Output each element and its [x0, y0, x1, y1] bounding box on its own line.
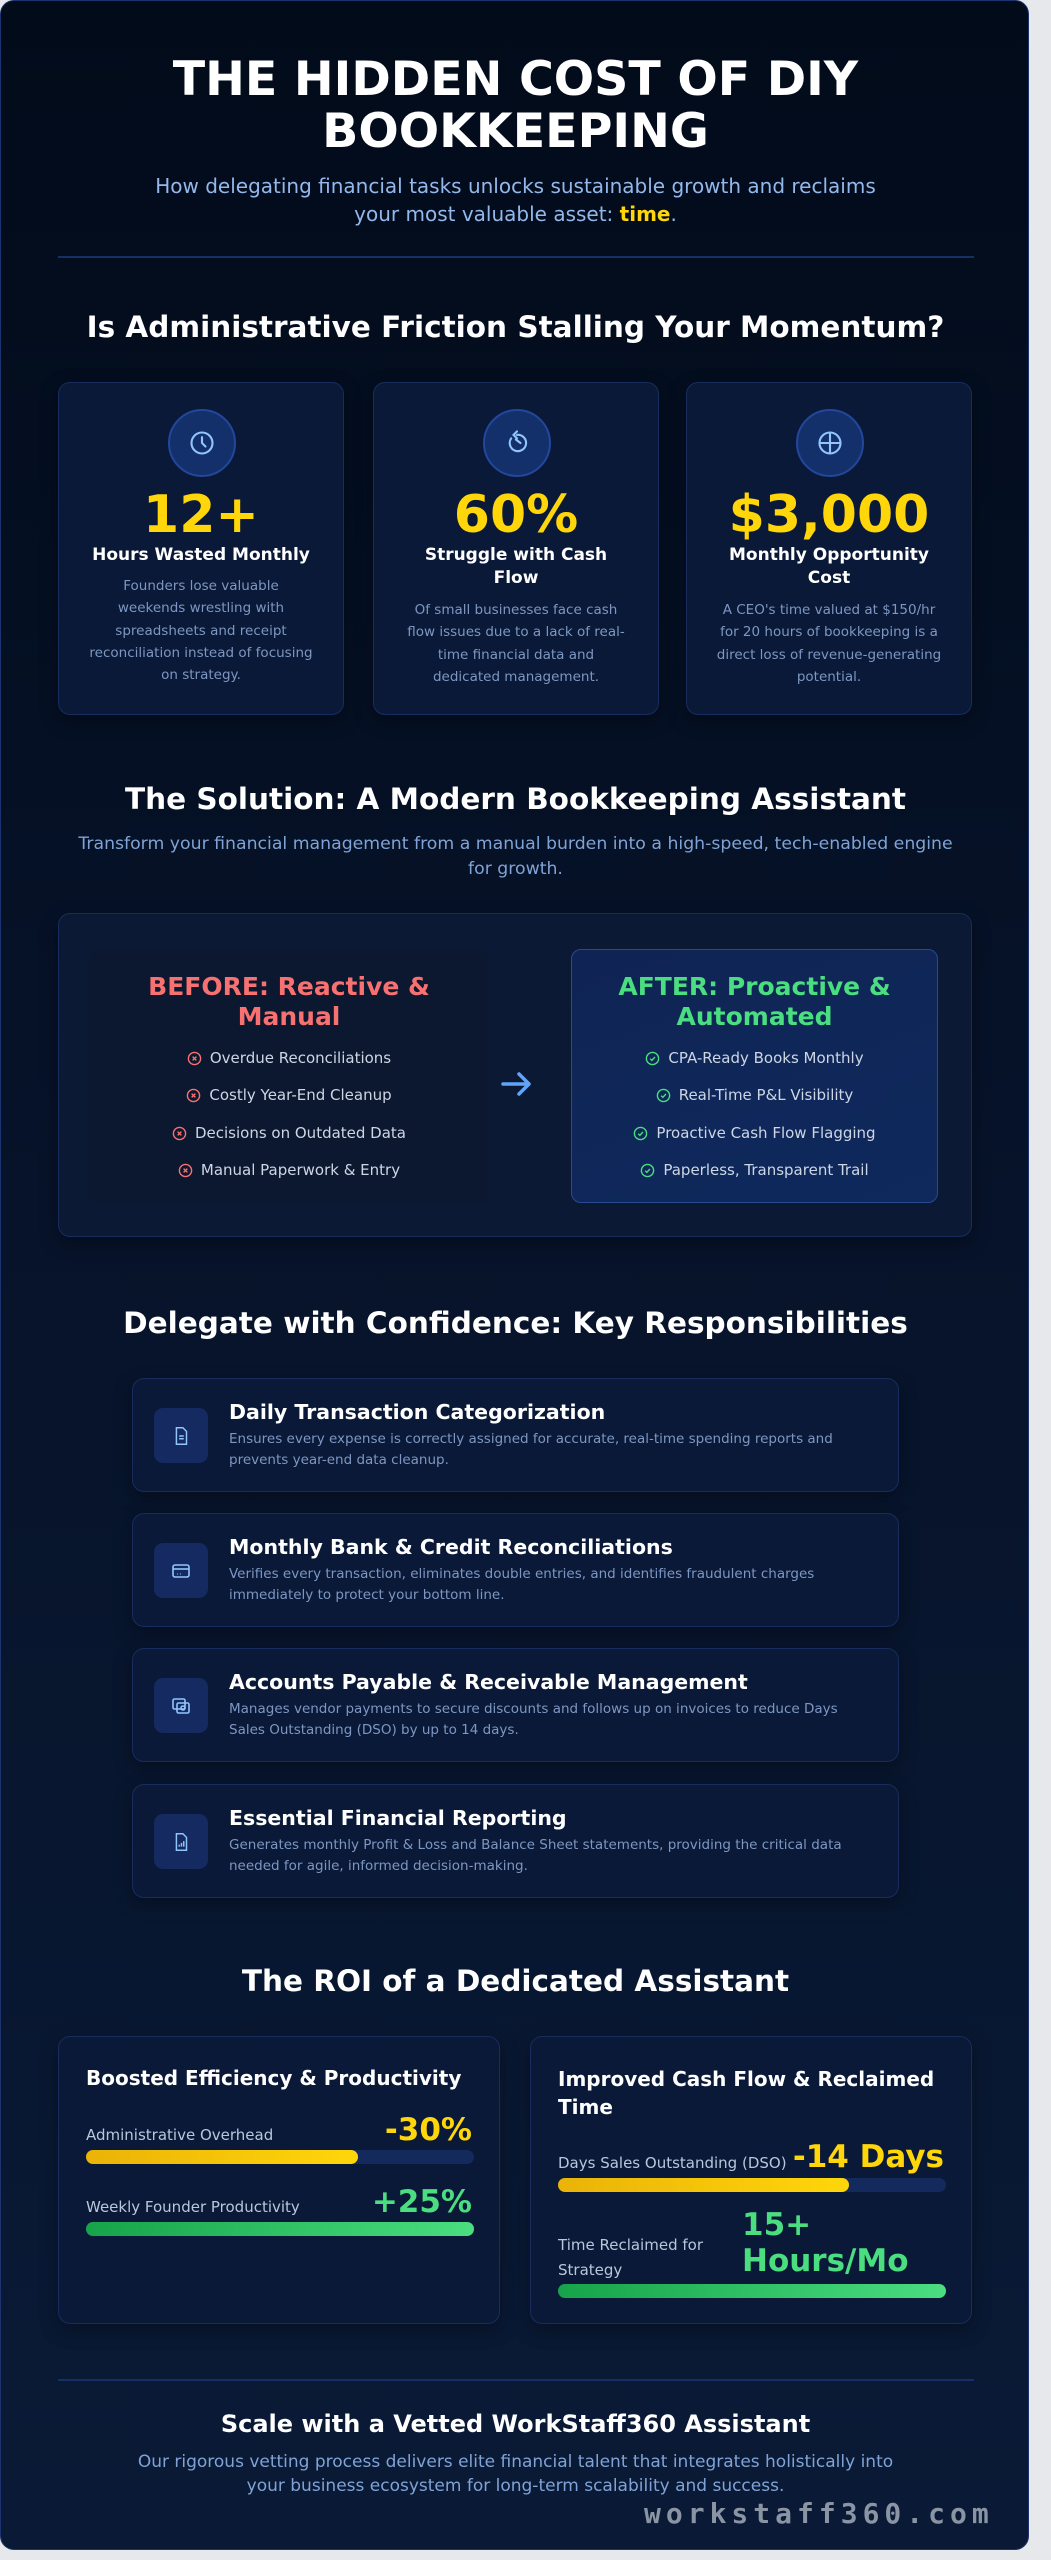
before list: Manual Paperwork & Entry	[201, 1161, 400, 1179]
stat label: Hours Wasted Monthly	[92, 545, 310, 565]
before list: Decisions on Outdated Data	[195, 1124, 406, 1142]
responsibility card: categorization	[132, 1378, 899, 1492]
responsibility card: reporting: Generates monthly Profit & Loss and Balance Sheet statements, providing the critical data needed for agile, informed decision-making.	[229, 1837, 842, 1874]
stat card: opportunity cost	[686, 382, 972, 715]
metric: DSO	[558, 2139, 946, 2192]
after list: Real-Time P&L Visibility	[679, 1086, 853, 1104]
stat card: hours	[58, 382, 344, 715]
stat description: spreadsheets and receipt	[115, 623, 287, 639]
stat number: 60%	[454, 485, 578, 545]
heading: ROI: The ROI of a Dedicated Assistant	[242, 1964, 789, 1998]
icon: card	[154, 1543, 208, 1598]
metric: time reclaimed	[558, 2207, 946, 2298]
metric: DSO: Days Sales Outstanding (DSO)	[558, 2154, 787, 2172]
after heading: Automated	[676, 1002, 832, 1031]
metric: DSO: -14 Days	[793, 2139, 944, 2175]
metric: founder productivity: Weekly Founder Productivity	[86, 2198, 300, 2216]
after heading: AFTER: Proactive &	[618, 972, 891, 1001]
solution subtitle: Transform your financial management from a manual burden into a high-speed, tech-enabled engine for growth.	[78, 834, 953, 879]
stat description: Of small businesses face cash flow issues due to a lack of real-time financial data and dedicated management.	[407, 602, 625, 685]
stat description: reconciliation instead of focusing	[89, 645, 313, 661]
heading: responsibilities: Delegate with Confidence: Key Responsibilities	[123, 1306, 908, 1340]
icon: cash	[154, 1678, 208, 1733]
after heading	[618, 972, 891, 1031]
stat label: Monthly Opportunity Cost	[729, 545, 929, 588]
stat label: Struggle with Cash Flow	[425, 545, 607, 588]
icon: pie	[796, 409, 864, 477]
before list: Costly Year-End Cleanup	[209, 1086, 392, 1104]
ROI card: efficiency	[58, 2036, 500, 2324]
ROI card: cash flow: Improved Cash Flow & Reclaimed Time	[558, 2067, 934, 2119]
before list: Overdue Reconciliations	[210, 1049, 391, 1067]
after list: Paperless, Transparent Trail	[663, 1161, 869, 1179]
heading: solution: The Solution: A Modern Bookkeeping Assistant	[125, 782, 906, 816]
metric: time reclaimed: Time Reclaimed for Strategy	[558, 2236, 703, 2279]
arrow	[501, 1072, 531, 1096]
watermark: workstaff360.com	[644, 2497, 994, 2530]
before heading: Manual	[238, 1002, 340, 1031]
responsibility card: reporting: Essential Financial Reporting	[229, 1806, 567, 1830]
title	[172, 52, 859, 159]
icon: clock	[168, 409, 236, 477]
stat description: weekends wrestling with	[118, 600, 284, 616]
metric: admin overhead: -30%	[385, 2112, 472, 2148]
stat description: A CEO's time valued at $150/hr for 20 hours of bookkeeping is a direct loss of revenue-generating potential.	[717, 602, 941, 685]
heading: friction: Is Administrative Friction Stalling Your Momentum?	[87, 310, 944, 344]
responsibility card: reporting	[132, 1784, 899, 1898]
responsibility card: AP/AR: Manages vendor payments to secure discounts and follows up on invoices to reduce Days Sales Outstanding (DSO) by up to 14 days.	[229, 1701, 838, 1738]
stat number: 12+	[143, 485, 259, 545]
stat number: $3,000	[729, 485, 929, 545]
metric: admin overhead	[86, 2112, 474, 2164]
icon: document	[154, 1408, 208, 1463]
ROI card: cash flow	[530, 2036, 972, 2324]
after list: Proactive Cash Flow Flagging	[656, 1124, 876, 1142]
metric: founder productivity: +25%	[372, 2184, 472, 2220]
responsibility card: AP/AR: Accounts Payable & Receivable Management	[229, 1670, 748, 1694]
footer text: Our rigorous vetting process delivers elite financial talent that integrates holistically into your business ecosystem for long-term scalability and success.	[138, 2452, 893, 2496]
responsibility card: categorization: Daily Transaction Categorization	[229, 1400, 605, 1424]
responsibility card: reconciliations: Monthly Bank & Credit Reconciliations	[229, 1535, 673, 1559]
metric: admin overhead: Administrative Overhead	[86, 2126, 273, 2144]
footer heading: Scale with a Vetted WorkStaff360 Assistant	[221, 2410, 810, 2438]
after list: CPA-Ready Books Monthly	[668, 1049, 864, 1067]
before column	[89, 950, 489, 1204]
responsibility card: reconciliations	[132, 1513, 899, 1627]
stat description	[89, 578, 313, 683]
stat description: Founders lose valuable	[123, 578, 279, 594]
metric: time reclaimed: 15+	[742, 2207, 811, 2243]
metric: time reclaimed: Hours/Mo	[742, 2243, 909, 2279]
before heading	[148, 972, 430, 1031]
ROI card: efficiency: Boosted Efficiency & Productivity	[86, 2066, 461, 2090]
stat card: cash flow	[373, 382, 659, 715]
stat description: on strategy.	[161, 667, 241, 683]
before heading: BEFORE: Reactive &	[148, 972, 430, 1001]
subtitle: How delegating financial tasks unlocks sustainable growth and reclaims your most valuable asset: time.	[155, 174, 876, 226]
after list	[634, 1049, 876, 1179]
before list	[172, 1049, 406, 1179]
panel: before/after comparison	[58, 913, 972, 1237]
metric: founder productivity	[86, 2184, 474, 2236]
responsibility card: categorization: Ensures every expense is correctly assigned for accurate, real-time spending reports and prevents year-end data cleanup.	[229, 1431, 833, 1468]
after column	[571, 949, 938, 1203]
responsibility card: reconciliations: Verifies every transaction, eliminates double entries, and identifies fraudulent charges immediately to protect your bottom line.	[229, 1566, 814, 1603]
title: THE HIDDEN COST OF DIY	[173, 52, 858, 107]
icon: report	[154, 1814, 208, 1869]
icon: refresh	[483, 409, 551, 477]
title: BOOKKEEPING	[322, 104, 709, 159]
responsibility card: AP/AR	[132, 1648, 899, 1762]
